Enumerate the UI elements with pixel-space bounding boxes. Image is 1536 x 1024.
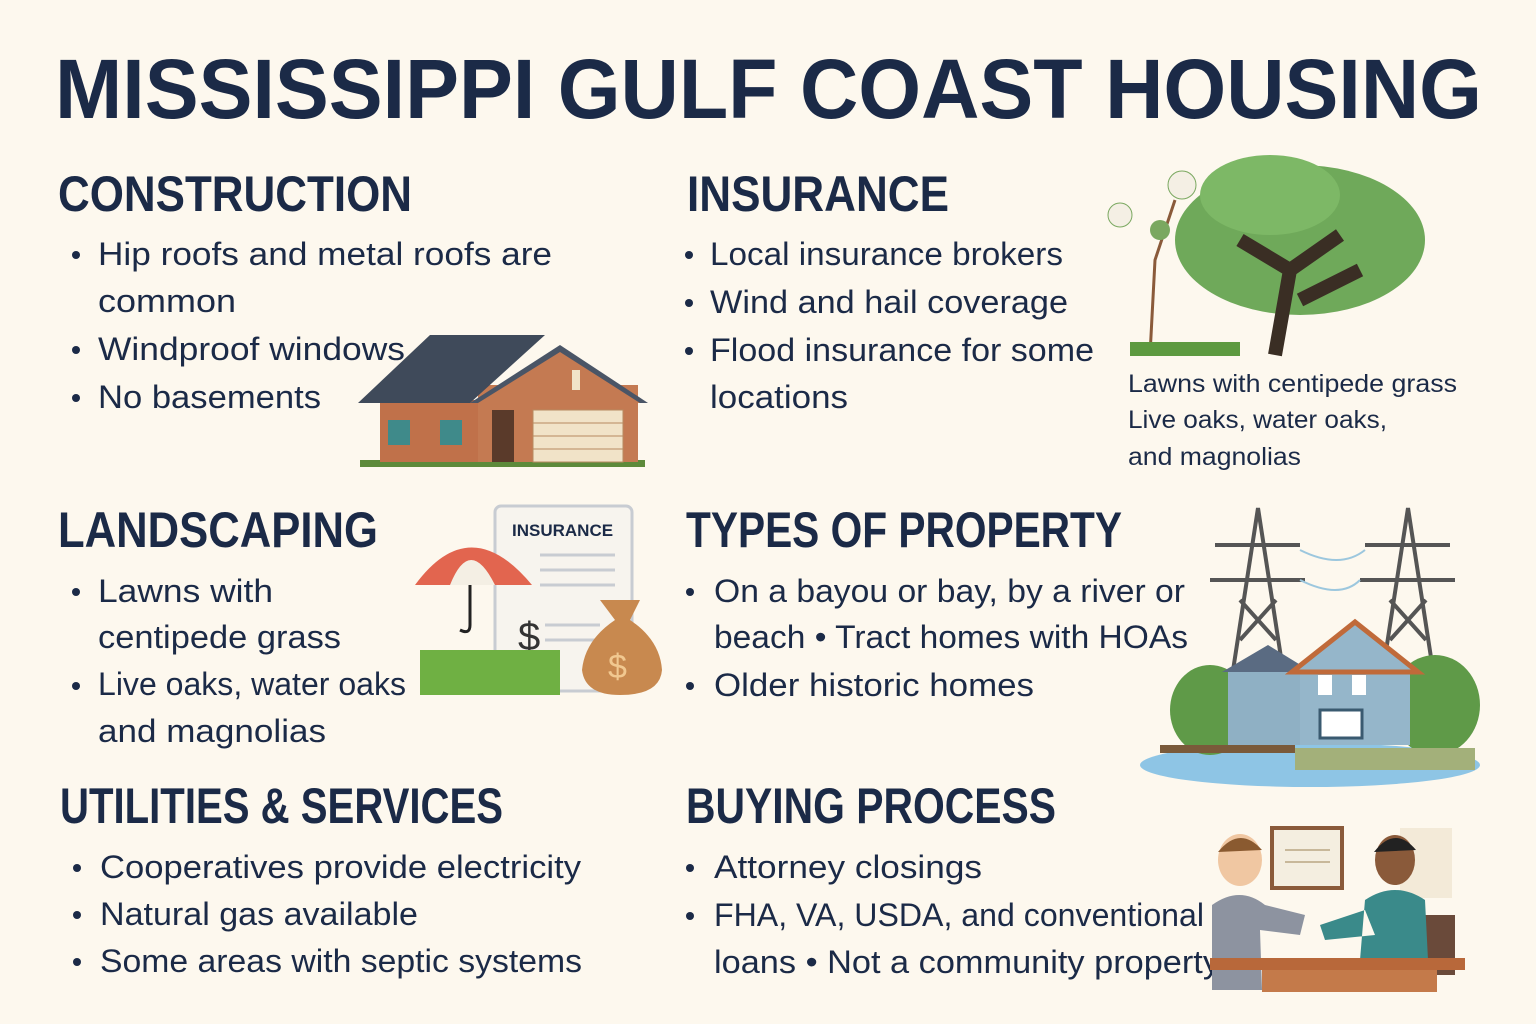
text block: insurance bullets: Local insurance brokers [710, 236, 1063, 272]
heading: construction: CONSTRUCTION [58, 166, 412, 222]
text block: construction bullets: Windproof windows [98, 331, 405, 367]
heading: types of property: TYPES OF PROPERTY [686, 502, 1122, 558]
icon: insurance document, umbrella, money bag [415, 506, 662, 695]
text block: tree caption: Lawns with centipede grass [1128, 370, 1457, 398]
text block: buying bullets: Attorney closings [714, 849, 982, 885]
text block: landscaping bullets: centipede grass [98, 619, 341, 655]
panel: types of property [686, 502, 1480, 787]
panel: construction [58, 166, 648, 467]
panel: buying process [686, 778, 1465, 992]
icon: waterfront house with power towers [1140, 508, 1480, 787]
icon: insurance document, umbrella, money bag: INSURANCE [512, 521, 613, 540]
panel: insurance [685, 155, 1457, 471]
text block: insurance bullets: Wind and hail coverage [710, 284, 1068, 320]
panel: landscaping [58, 502, 662, 749]
text block: property bullets [686, 573, 1188, 703]
panel: utilities & services [60, 778, 582, 979]
heading: landscaping: LANDSCAPING [58, 502, 378, 558]
icon: house [358, 335, 648, 467]
text block: utilities bullets: Some areas with septic systems [100, 943, 582, 979]
icon: tree and magnolia [1108, 155, 1425, 356]
text block: buying bullets [686, 849, 1220, 980]
text block: tree caption [1128, 370, 1457, 471]
text block: property bullets: Older historic homes [714, 667, 1034, 703]
icon: insurance document, umbrella, money bag: $ [608, 648, 627, 686]
heading: insurance: INSURANCE [687, 166, 949, 222]
text block: landscaping bullets: Live oaks, water oaks [98, 666, 406, 702]
icon: insurance document, umbrella, money bag: $ [518, 615, 540, 659]
text block: tree caption: Live oaks, water oaks, [1128, 406, 1387, 434]
text block: insurance bullets: Flood insurance for some [710, 332, 1094, 368]
icon: closing handshake [1210, 828, 1465, 992]
text block: construction bullets: common [98, 283, 236, 319]
text block: construction bullets: Hip roofs and metal roofs are [98, 236, 552, 272]
text block: landscaping bullets [72, 573, 406, 749]
text block: property bullets: On a bayou or bay, by a river or [714, 573, 1185, 609]
text block: construction bullets: No basements [98, 379, 321, 415]
text block: buying bullets: FHA, VA, USDA, and conventional [714, 897, 1204, 933]
text block: insurance bullets: locations [710, 379, 848, 415]
title: MISSISSIPPI GULF COAST HOUSING [55, 42, 1482, 136]
text block: landscaping bullets: and magnolias [98, 713, 326, 749]
text block: tree caption: and magnolias [1128, 443, 1301, 471]
heading: buying process: BUYING PROCESS [686, 778, 1056, 834]
text block: utilities bullets: Cooperatives provide electricity [100, 849, 581, 885]
text block: construction bullets [72, 236, 552, 415]
text block: buying bullets: loans • Not a community property [714, 944, 1220, 980]
text block: utilities bullets [73, 849, 582, 979]
heading: utilities: UTILITIES & SERVICES [60, 778, 503, 834]
text block: property bullets: beach • Tract homes with HOAs [714, 619, 1188, 655]
text block: landscaping bullets: Lawns with [98, 573, 273, 609]
text block: utilities bullets: Natural gas available [100, 896, 418, 932]
text block: insurance bullets [685, 236, 1094, 415]
